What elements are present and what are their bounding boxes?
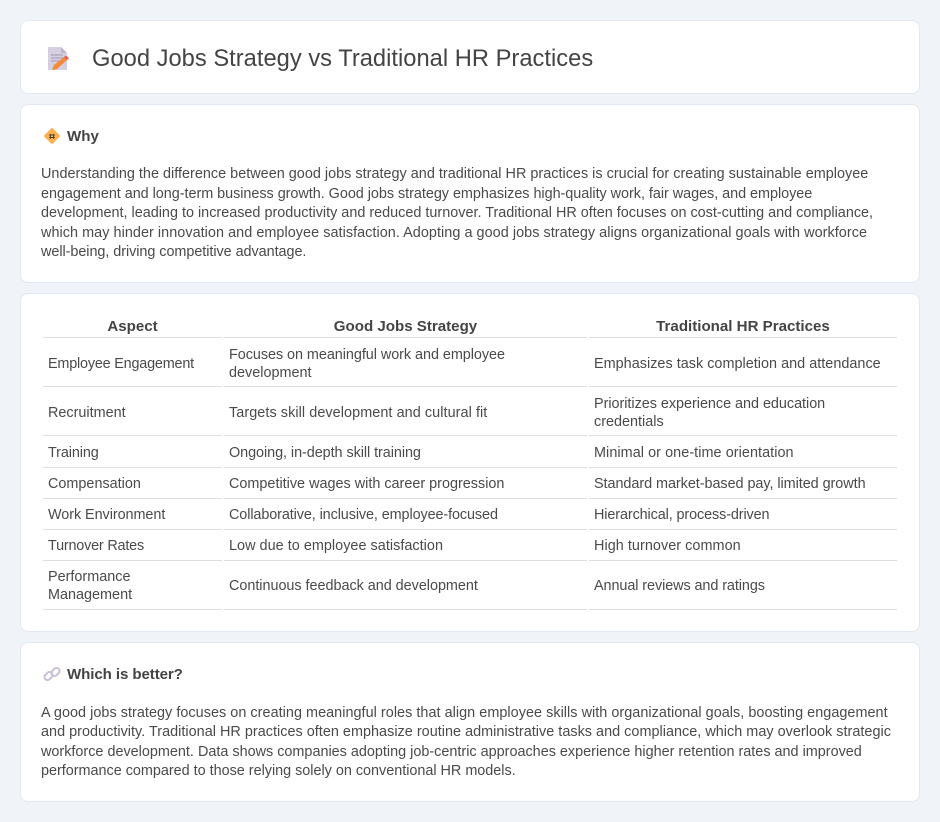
- text block: which is better: performance compared to those relying solely on conventional HR models.: [41, 763, 516, 779]
- row: compensation: Compensation: [48, 476, 141, 492]
- title: Good Jobs Strategy vs Traditional HR Practices: [92, 46, 593, 72]
- icon: chain link: [44, 667, 60, 681]
- row: employee engagement: development: [229, 365, 312, 381]
- row: performance management: Annual reviews and ratings: [594, 578, 765, 594]
- row: employee engagement: Emphasizes task completion and attendance: [594, 356, 881, 372]
- text block: why: [41, 166, 873, 260]
- text block: why: development, leading to increased productivity and reduced turnover. Traditional HR often focuses on cost-cutting and compliance,: [41, 205, 873, 221]
- table header: Traditional HR Practices: [656, 318, 830, 335]
- text block: why: which may hinder innovation and employee satisfaction. Adopting a good jobs strategy aligns organizational goals with workforce: [41, 224, 867, 240]
- row: training: [48, 445, 794, 461]
- row: work environment: Hierarchical, process-driven: [594, 507, 769, 523]
- text block: why: Understanding the difference between good jobs strategy and traditional HR practices is crucial for creating sustainable employee: [41, 166, 868, 182]
- heading: why: Why: [67, 128, 99, 145]
- icon: warning diamond: [44, 128, 60, 144]
- text block: why: well-being, driving competitive advantage.: [41, 244, 306, 260]
- row: compensation: Competitive wages with career progression: [229, 476, 504, 492]
- table header: Aspect: [107, 318, 158, 335]
- text block: which is better: [41, 704, 891, 779]
- table header: Good Jobs Strategy: [334, 318, 477, 335]
- row: work environment: [48, 507, 769, 523]
- row: work environment: Collaborative, inclusive, employee-focused: [229, 507, 498, 523]
- row: turnover rates: Low due to employee satisfaction: [229, 538, 443, 554]
- row: turnover rates: High turnover common: [594, 538, 741, 554]
- row: recruitment: Recruitment: [48, 405, 126, 421]
- row: training: Ongoing, in-depth skill training: [229, 445, 421, 461]
- row: compensation: Standard market-based pay, limited growth: [594, 476, 866, 492]
- row: turnover rates: Turnover Rates: [48, 538, 144, 554]
- row: performance management: [48, 569, 765, 603]
- panel: header: [20, 20, 920, 94]
- row: turnover rates: [48, 538, 741, 554]
- text block: why: engagement and long-term business growth. Good jobs strategy emphasizes high-quality work, fair wages, and employee: [41, 186, 812, 202]
- row: performance management: Continuous feedback and development: [229, 578, 478, 594]
- row: performance management: Performance: [48, 569, 130, 585]
- row: training: Minimal or one-time orientation: [594, 445, 794, 461]
- row: compensation: [48, 476, 866, 492]
- panel: which is better: [20, 642, 920, 802]
- row: work environment: Work Environment: [48, 507, 165, 523]
- row: recruitment: Targets skill development and cultural fit: [229, 405, 487, 421]
- panel: why: [20, 104, 920, 283]
- row: recruitment: Prioritizes experience and education: [594, 396, 825, 412]
- row: training: Training: [48, 445, 99, 461]
- row: employee engagement: Focuses on meaningful work and employee: [229, 347, 505, 363]
- icon: document with pencil: [48, 47, 69, 70]
- row: performance management: Management: [48, 587, 132, 603]
- row: employee engagement: [48, 347, 881, 381]
- text block: which is better: workforce development. Data shows companies adopting job-centric approaches experience higher retention rates and improved: [41, 744, 862, 760]
- text block: which is better: A good jobs strategy focuses on creating meaningful roles that align employee skills with organizational goals, boosting engagement: [41, 704, 888, 720]
- heading: which is better: Which is better?: [67, 666, 183, 683]
- text block: which is better: and productivity. Traditional HR practices often emphasize routine administrative tasks and compliance, which may overlook strategic: [41, 724, 891, 740]
- row: recruitment: [48, 396, 825, 430]
- row: employee engagement: Employee Engagement: [48, 356, 194, 372]
- row: recruitment: credentials: [594, 414, 664, 430]
- table header: [107, 318, 830, 335]
- panel: comparison table: [20, 293, 920, 632]
